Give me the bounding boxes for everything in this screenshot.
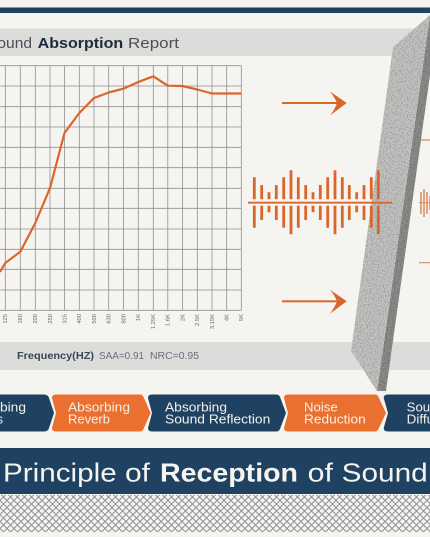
process step: absorbing sound reflection: Sound Reflection	[165, 412, 270, 427]
main title: Sound	[342, 458, 428, 488]
SAA and NRC values: NRC=0.95	[150, 351, 199, 362]
main title: of	[125, 458, 151, 488]
report header bar	[0, 28, 430, 56]
main title: Principle	[3, 458, 117, 488]
frequency tick labels: 250	[48, 314, 54, 324]
frequency tick labels: 3.15K	[210, 314, 216, 329]
process step: absorbing sound reflection	[148, 394, 286, 432]
frequency label: Frequency(HZ)	[17, 351, 94, 362]
report title: Report	[128, 35, 180, 52]
main title: Reception	[160, 458, 298, 488]
process step: noise reduction	[284, 394, 386, 432]
frequency tick labels: 160	[18, 314, 24, 324]
process step: absorbing reverb: Reverb	[68, 412, 110, 427]
frequency tick labels: 5K	[239, 314, 245, 321]
absorption line chart	[0, 66, 245, 329]
process step: sound diffusion	[384, 394, 430, 432]
lattice texture strip	[0, 495, 430, 532]
frequency tick labels: 2K	[180, 314, 186, 321]
process step: absorbing reverb	[52, 394, 151, 432]
frequency tick labels: 200	[33, 314, 39, 324]
sound waveform: incoming	[248, 170, 392, 234]
report title: Absorption	[38, 35, 123, 52]
frequency tick labels: 630	[107, 314, 113, 324]
frequency tick labels: 1K	[136, 314, 142, 321]
frequency tick labels: 2.5K	[195, 314, 201, 326]
process step: noise reduction: Noise	[304, 400, 338, 415]
frequency tick labels: 1.25K	[151, 314, 157, 329]
top rule	[0, 8, 430, 13]
frequency tick labels: 125	[3, 314, 9, 324]
frequency tick labels	[3, 314, 245, 329]
panel front face	[351, 15, 430, 391]
absorption curve	[0, 76, 241, 272]
frequency tick labels: 500	[92, 314, 98, 324]
process step: noise reduction: Reduction	[304, 412, 366, 427]
title band	[0, 448, 430, 494]
SAA and NRC values: SAA=0.91	[99, 351, 144, 362]
report footer bar	[0, 342, 430, 370]
process step: absorbing sound reflection: Absorbing	[165, 400, 227, 415]
frequency tick labels: 1.6K	[166, 314, 172, 326]
frequency tick labels: 315	[62, 314, 68, 324]
arrow: lower sound wave	[282, 290, 347, 314]
outgoing sound marks	[419, 140, 430, 263]
panel side edge	[377, 15, 430, 391]
main title: of	[308, 458, 334, 488]
acoustic panel	[351, 15, 430, 391]
process step: absorbing echoes	[0, 394, 54, 432]
arrow: upper sound wave	[282, 92, 347, 116]
frequency tick labels: 4K	[225, 314, 231, 321]
process step: absorbing reverb: Absorbing	[68, 400, 130, 415]
frequency tick labels: 800	[121, 314, 127, 324]
frequency tick labels: 400	[77, 314, 83, 324]
